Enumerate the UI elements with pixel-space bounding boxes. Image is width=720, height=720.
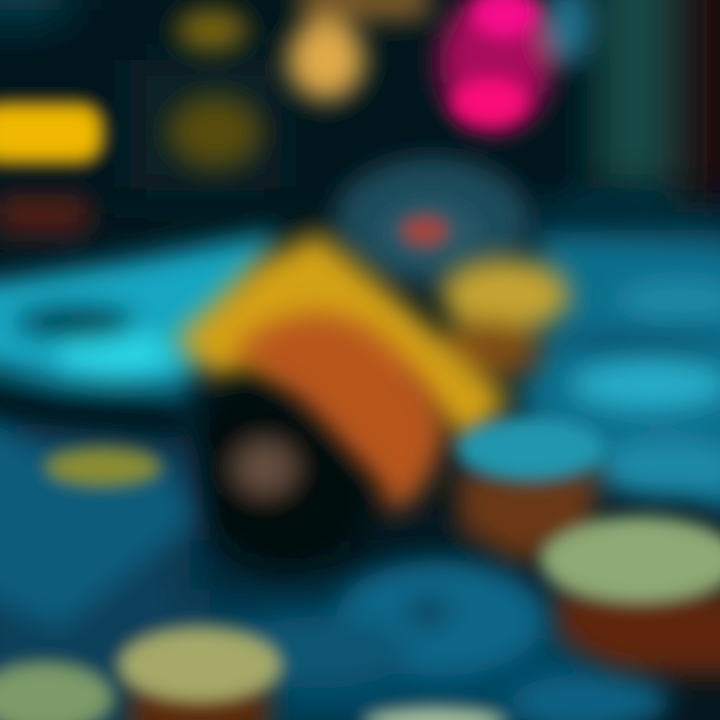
panel: right blue stack	[520, 187, 720, 520]
panel: left cyan disc	[0, 232, 280, 440]
panel: coin far right	[550, 590, 720, 675]
icon: magenta light bottom	[452, 78, 528, 126]
panel: left blue card	[0, 410, 195, 630]
panel: gold coin behind	[436, 259, 569, 380]
panel: orange wallet	[232, 313, 444, 509]
icon: grey-blue round chip	[334, 158, 530, 286]
icon: coin bottom edge	[363, 708, 507, 720]
icon: coin top far right	[540, 516, 720, 604]
icon: pouch clasp	[235, 442, 295, 494]
icon: coin top bottom centre	[118, 627, 282, 703]
icon: olive light upper	[176, 10, 248, 50]
icon: blue glow	[544, 0, 592, 65]
icon: left yellow strip	[45, 448, 161, 486]
panel: coin bottom centre	[130, 680, 270, 720]
icon: coin top right centre	[456, 417, 604, 481]
panel: yellow card	[175, 232, 510, 445]
icon: magenta light top	[471, 0, 539, 38]
icon: warm glow top	[300, 0, 430, 20]
icon: warm lamp	[288, 20, 364, 100]
icon: magenta halo	[439, 0, 551, 130]
lower blue table	[0, 230, 720, 720]
icon: olive light lower	[169, 96, 261, 168]
icon: yellow light bar	[0, 104, 102, 162]
dark upper scene	[0, 0, 720, 230]
icon: coin bottom left	[0, 662, 113, 720]
panel: upper lights	[0, 0, 592, 235]
panel: blue disc bottom	[230, 560, 670, 720]
icon: chip red centre	[401, 216, 449, 246]
panel: coin stack right centre	[455, 470, 600, 565]
panel: black pouch	[195, 368, 380, 572]
icon: red lights	[0, 195, 90, 235]
